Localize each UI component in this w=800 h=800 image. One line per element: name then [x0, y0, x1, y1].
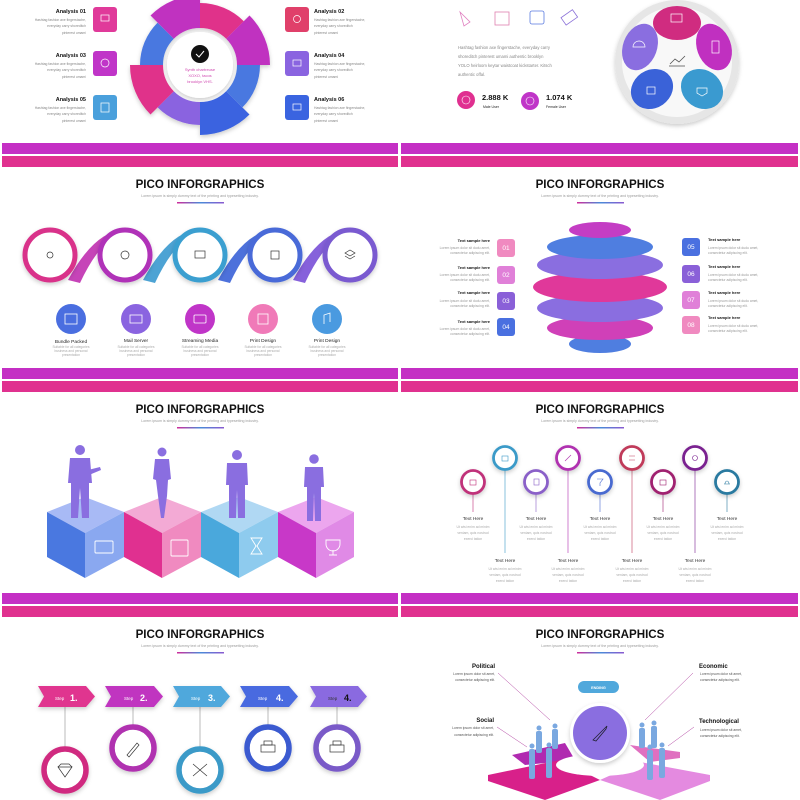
panel: PEST diagram: consectetur adipiscing elit.: [700, 734, 740, 738]
panel: feature icons: Bundle Packed: [55, 339, 87, 345]
panel: feature icons: business and personal: [120, 349, 153, 353]
people: [529, 720, 665, 780]
panel: steps: 4.: [276, 693, 284, 703]
panel: timeline circles: exerci tation: [686, 579, 704, 583]
sample texts: Text sample here: [458, 319, 491, 324]
title: slide 3 right: Lorem ipsum is simply dummy text of the printing and typesetting industry.: [541, 419, 659, 423]
analysis items: Analysis 04: [314, 53, 345, 59]
analysis items: Hashtag fashion axe fingerstache,: [35, 62, 86, 66]
panel: PEST diagram: Economic: [699, 664, 728, 670]
title: slide 2 right: PICO INFORGRAPHICS: [536, 178, 665, 191]
stat male: [457, 91, 475, 109]
panel: PEST diagram: [452, 664, 742, 800]
panel: timeline circles: Ut wisi enim ad minim: [457, 525, 490, 529]
title: slide 4 right: [536, 628, 665, 654]
sample texts: consectetur adipiscing elit.: [450, 304, 490, 308]
stat female: [521, 92, 539, 110]
title: slide 2 right: [536, 178, 665, 204]
panel: user stats petals: [457, 0, 739, 124]
panel: feature icons: presentation: [318, 353, 336, 357]
analysis items: pinterest umami: [314, 75, 338, 79]
title: slide 2 left: PICO INFORGRAPHICS: [136, 178, 265, 191]
panel: timeline circles: Ut wisi enim ad minim: [584, 525, 617, 529]
panel: feature icons: presentation: [127, 353, 145, 357]
sample texts: Lorem ipsum dolor sit dudu amet,: [708, 246, 758, 250]
panel: timeline circles: exerci tation: [654, 537, 672, 541]
sample texts: consectetur adipiscing elit.: [450, 332, 490, 336]
central circle: [570, 703, 630, 763]
panel: PEST diagram: consectetur adipiscing elit.: [454, 733, 494, 737]
panel: timeline circles: veniam, quis nostrud: [457, 531, 489, 535]
panel: timeline circles: exerci tation: [527, 537, 545, 541]
panel: steps: Step: [258, 696, 268, 701]
sample texts: [440, 237, 758, 336]
panel: feature icons: Streaming Media: [182, 338, 218, 344]
panel: timeline circles: Text Here: [653, 516, 674, 522]
panel: feature icons: presentation: [62, 353, 80, 357]
panel: PEST diagram: consectetur adipiscing elit.: [700, 678, 740, 682]
panel: user stats petals: 1.074 K: [546, 93, 573, 102]
silhouettes: [68, 445, 324, 521]
number boxes: 05: [687, 244, 695, 251]
sample texts: Text sample here: [708, 237, 741, 242]
panel: analysis donut: XOXO, tacos: [188, 73, 212, 78]
sample texts: Text sample here: [708, 290, 741, 295]
panel: timeline circles: Text Here: [495, 558, 516, 564]
donut chart: [130, 0, 270, 135]
panel: feature icons: business and personal: [184, 349, 217, 353]
panel: feature icons: business and personal: [54, 349, 88, 353]
panel: feature icons: business and personal: [246, 349, 280, 353]
panel: timeline circles: exerci tation: [623, 579, 641, 583]
title: slide 3 right: [536, 403, 665, 428]
top icons: [460, 10, 578, 26]
panel: timeline circles: exerci tation: [591, 537, 609, 541]
panel: feature icons: presentation: [254, 353, 272, 357]
sample texts: consectetur adipiscing elit.: [450, 278, 490, 282]
analysis items: pinterest umami: [62, 119, 86, 123]
panel: timeline circles: exerci tation: [464, 537, 482, 541]
panel: feature icons: Suitable for all categories: [244, 345, 282, 349]
panel: PEST diagram: ENDING: [591, 686, 606, 690]
analysis items: Analysis 05: [56, 97, 86, 103]
panel: timeline circles: [457, 446, 744, 583]
panel: timeline circles: veniam, quis nostrud: [520, 531, 552, 535]
analysis items: everyday carry shoreditch: [314, 24, 353, 28]
panel: timeline circles: veniam, quis nostrud: [647, 531, 679, 535]
analysis items: everyday carry shoreditch: [47, 112, 86, 116]
panel: feature icons: Print Design: [250, 338, 276, 344]
sample texts: consectetur adipiscing elit.: [708, 304, 748, 308]
panel: steps: Step: [55, 696, 65, 701]
band bars: [2, 143, 798, 617]
sample texts: Text sample here: [458, 265, 491, 270]
panel: cubes: [47, 497, 354, 578]
title: slide 4 right: PICO INFORGRAPHICS: [536, 628, 665, 641]
panel: user stats petals: shoreditch pinterest umami authentic brooklyn: [458, 54, 544, 59]
panel: timeline circles: veniam, quis nostrud: [552, 573, 584, 577]
title: slide 4 right: Lorem ipsum is simply dummy text of the printing and typesetting industry.: [541, 644, 659, 648]
number boxes: 02: [502, 272, 510, 279]
number boxes: 06: [687, 271, 695, 278]
title: slide 3 left: [136, 403, 265, 428]
panel: PEST diagram: Social: [476, 718, 494, 724]
sample texts: Lorem ipsum dolor sit dudu amet,: [440, 273, 490, 277]
analysis items: everyday carry shoreditch: [47, 68, 86, 72]
panel: swoosh circles: [25, 230, 375, 283]
panel: timeline circles: exerci tation: [559, 579, 577, 583]
analysis items: Analysis 03: [56, 53, 86, 59]
panel: steps: [38, 686, 367, 791]
panel: PEST diagram: Lorem ipsum dolor sit amet,: [700, 672, 742, 676]
sample texts: consectetur adipiscing elit.: [708, 278, 748, 282]
analysis items: everyday carry shoreditch: [314, 112, 353, 116]
panel: PEST diagram: consectetur adipiscing elit.: [455, 678, 495, 682]
title: slide 4 left: PICO INFORGRAPHICS: [136, 628, 265, 641]
panel: timeline circles: Ut wisi enim ad minim: [679, 567, 712, 571]
connector lines: [497, 673, 694, 747]
panel: user stats petals: authentic offal.: [458, 72, 485, 77]
title: slide 2 right: Lorem ipsum is simply dummy text of the printing and typesetting industry.: [541, 194, 659, 198]
panel: timeline circles: Text Here: [685, 558, 706, 564]
panel: timeline circles: veniam, quis nostrud: [616, 573, 648, 577]
panel: steps: Step: [191, 696, 201, 701]
title: slide 2 left: Lorem ipsum is simply dummy text of the printing and typesetting industry.: [141, 194, 259, 198]
sample texts: Lorem ipsum dolor sit dudu amet,: [440, 299, 490, 303]
panel: feature icons: Mail Server: [124, 338, 149, 344]
sample texts: Lorem ipsum dolor sit dudu amet,: [440, 327, 490, 331]
title: slide 4 left: Lorem ipsum is simply dummy text of the printing and typesetting industry.: [141, 644, 259, 648]
panel: timeline circles: veniam, quis nostrud: [679, 573, 711, 577]
sample texts: Text sample here: [458, 238, 491, 243]
ending pill: [578, 681, 619, 693]
panel: timeline circles: Ut wisi enim ad minim: [711, 525, 744, 529]
panel: timeline circles: veniam, quis nostrud: [711, 531, 743, 535]
panel: steps: 3.: [208, 693, 216, 703]
panel: timeline circles: Ut wisi enim ad minim: [616, 567, 649, 571]
panel: timeline circles: Ut wisi enim ad minim: [647, 525, 680, 529]
panel: timeline circles: exerci tation: [718, 537, 736, 541]
panel: ellipse sphere: [533, 222, 667, 353]
panel: timeline circles: Text Here: [463, 516, 484, 522]
number boxes: 04: [502, 324, 510, 331]
title: slide 2 left: [136, 178, 265, 204]
panel: PEST diagram: Lorem ipsum dolor sit amet,: [452, 726, 494, 730]
number boxes: 08: [687, 322, 695, 329]
analysis items: Analysis 02: [314, 9, 344, 15]
analysis items: Hashtag fashion axe fingerstache,: [314, 18, 365, 22]
analysis items: Hashtag fashion axe fingerstache,: [35, 106, 86, 110]
panel: user stats petals: Female User: [546, 105, 567, 109]
panel: user stats petals: YOLO heirloom keytar waistcoat kickstarter. Kitsch: [458, 63, 552, 68]
panel: timeline circles: Text Here: [717, 516, 738, 522]
analysis items: pinterest umami: [62, 75, 86, 79]
panel: feature icons: [52, 304, 346, 357]
panel: timeline circles: Ut wisi enim ad minim: [520, 525, 553, 529]
panel: timeline circles: Text Here: [622, 558, 643, 564]
title: slide 3 right: PICO INFORGRAPHICS: [536, 403, 665, 416]
analysis items: [35, 7, 365, 123]
center icon: [191, 45, 209, 63]
petal circle: [615, 0, 739, 124]
panel: analysis donut: [35, 0, 365, 135]
panel: steps: 4.: [344, 693, 352, 703]
number boxes: [497, 238, 700, 336]
analysis items: pinterest umami: [314, 31, 338, 35]
panel: timeline circles: veniam, quis nostrud: [489, 573, 521, 577]
sample texts: Text sample here: [458, 290, 491, 295]
panel: PEST diagram: Technological: [699, 719, 739, 725]
analysis items: pinterest umami: [62, 31, 86, 35]
panel: feature icons: Suitable for all categories: [117, 345, 155, 349]
panel: feature icons: Suitable for all categories: [52, 345, 90, 349]
panel: user stats petals: Male User: [483, 105, 500, 109]
title: slide 3 left: PICO INFORGRAPHICS: [136, 403, 265, 416]
panel: timeline circles: Text Here: [590, 516, 611, 522]
sample texts: Lorem ipsum dolor sit dudu amet,: [708, 324, 758, 328]
sample texts: consectetur adipiscing elit.: [708, 251, 748, 255]
number boxes: 01: [502, 245, 510, 252]
panel: analysis donut: Synth chartreuse: [185, 67, 216, 72]
title: slide 4 left: [136, 628, 265, 654]
panel: feature icons: Print Design: [314, 338, 340, 344]
sample texts: Lorem ipsum dolor sit dudu amet,: [440, 246, 490, 250]
analysis items: Hashtag fashion axe fingerstache,: [314, 62, 365, 66]
panel: timeline circles: Text Here: [526, 516, 547, 522]
panel: PEST diagram: Lorem ipsum dolor sit amet,: [700, 728, 742, 732]
labels: Political: [472, 664, 495, 670]
sample texts: consectetur adipiscing elit.: [708, 329, 748, 333]
sample texts: Lorem ipsum dolor sit dudu amet,: [708, 273, 758, 277]
sample texts: Text sample here: [708, 264, 741, 269]
analysis items: pinterest umami: [314, 119, 338, 123]
panel: feature icons: business and personal: [310, 349, 344, 353]
panel: feature icons: Suitable for all categories: [308, 345, 346, 349]
number boxes: 07: [687, 297, 695, 304]
panel: feature icons: Suitable for all categories: [181, 345, 219, 349]
sample texts: Text sample here: [708, 315, 741, 320]
analysis items: Hashtag fashion axe fingerstache,: [314, 106, 365, 110]
analysis items: Hashtag fashion axe fingerstache,: [35, 18, 86, 22]
panel: steps: 1.: [70, 693, 78, 703]
panel: timeline circles: Ut wisi enim ad minim: [489, 567, 522, 571]
number boxes: 03: [502, 298, 510, 305]
panel: user stats petals: 2.888 K: [482, 93, 509, 102]
panel: feature icons: presentation: [191, 353, 209, 357]
analysis items: Analysis 06: [314, 97, 344, 103]
panel: timeline circles: Ut wisi enim ad minim: [552, 567, 585, 571]
panel: steps: Step: [124, 696, 134, 701]
panel: timeline circles: veniam, quis nostrud: [584, 531, 616, 535]
analysis items: everyday carry shoreditch: [47, 24, 86, 28]
panel: PEST diagram: Lorem ipsum dolor sit amet,: [453, 672, 495, 676]
sample texts: consectetur adipiscing elit.: [450, 251, 490, 255]
analysis items: Analysis 01: [56, 9, 86, 15]
panel: timeline circles: exerci tation: [496, 579, 514, 583]
panel: steps: Step: [328, 696, 338, 701]
analysis items: everyday carry shoreditch: [314, 68, 353, 72]
panel: analysis donut: brooklyn VHS.: [187, 79, 213, 84]
platform: [512, 743, 575, 765]
paragraph: Hashtag fashion axe fingerstache, everyday carry: [458, 45, 551, 50]
sample texts: Lorem ipsum dolor sit dudu amet,: [708, 299, 758, 303]
panel: timeline circles: Text Here: [558, 558, 579, 564]
title: slide 3 left: Lorem ipsum is simply dummy text of the printing and typesetting industry.: [141, 419, 259, 423]
panel: steps: 2.: [140, 693, 148, 703]
